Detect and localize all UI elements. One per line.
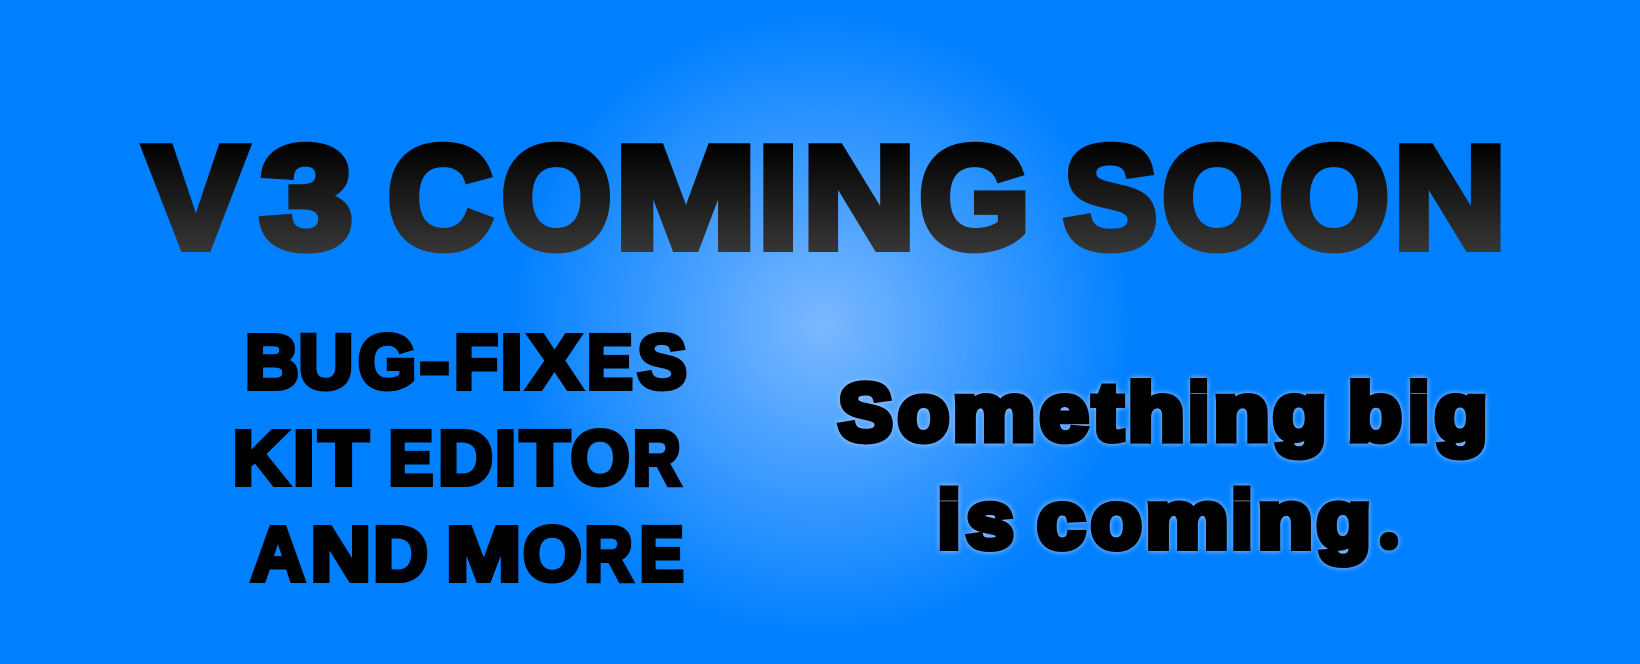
teaser line 1: i: [1188, 368, 1209, 458]
teaser line 1: S: [838, 368, 892, 458]
feature: kit editor: I: [293, 416, 315, 502]
teaser line 1: b: [1348, 368, 1402, 458]
teaser line 2: i: [1231, 476, 1253, 566]
feature: and more: R: [584, 512, 633, 598]
title: M: [615, 116, 756, 278]
feature: bug-fixes: B: [245, 320, 299, 406]
feature: kit editor: E: [388, 416, 433, 502]
feature: bug-fixes: X: [528, 320, 582, 406]
title: O: [1162, 116, 1272, 278]
title: 3: [260, 116, 352, 278]
teaser line 2: n: [1258, 476, 1313, 566]
feature: and more: D: [373, 512, 428, 598]
teaser line 2: i: [938, 476, 961, 566]
teaser line 1: t: [1093, 368, 1123, 458]
feature: and more: A: [251, 512, 305, 598]
teaser line 1: g: [1435, 368, 1488, 458]
feature: kit editor: O: [570, 416, 630, 502]
feature: bug-fixes: I: [500, 320, 523, 406]
teaser line 1: m: [953, 368, 1035, 458]
title: I: [758, 116, 798, 278]
feature: bug-fixes: G: [358, 320, 416, 406]
title: C: [388, 116, 492, 278]
teaser text: [838, 368, 1488, 566]
feature: and more: E: [639, 512, 684, 598]
teaser line 2: .: [1388, 534, 1391, 545]
teaser line 2: o: [1091, 476, 1142, 566]
title: N: [803, 116, 916, 278]
feature: bug-fixes: S: [637, 320, 687, 406]
title: S: [1064, 116, 1157, 278]
title: O: [1279, 116, 1389, 278]
feature: and more: M: [446, 512, 522, 598]
feature: kit editor: I: [495, 416, 516, 502]
feature: kit editor: D: [438, 416, 493, 502]
teaser line 1: e: [1040, 368, 1088, 458]
teaser line 1: i: [1408, 368, 1429, 458]
title: O: [502, 116, 612, 278]
feature list: [232, 320, 687, 598]
teaser line 1: o: [898, 368, 949, 458]
feature: bug-fixes: -: [420, 320, 450, 406]
feature: kit editor: K: [232, 416, 288, 502]
teaser line 1: g: [1273, 368, 1326, 458]
feature: kit editor: R: [633, 416, 681, 502]
feature: bug-fixes: E: [587, 320, 633, 406]
feature: kit editor: T: [319, 416, 369, 502]
teaser line 2: s: [966, 476, 1014, 566]
teaser line 1: h: [1128, 368, 1185, 458]
feature: and more: O: [523, 512, 582, 598]
feature: bug-fixes: F: [454, 320, 498, 406]
title: V: [145, 116, 246, 278]
feature: and more: N: [310, 512, 371, 598]
title: N: [1394, 116, 1506, 278]
teaser line 1: n: [1214, 368, 1270, 458]
title: G: [919, 116, 1030, 278]
teaser line 2: c: [1037, 476, 1085, 566]
feature: kit editor: T: [520, 416, 570, 502]
teaser line 2: g: [1317, 476, 1371, 566]
feature: bug-fixes: U: [298, 320, 353, 406]
teaser line 2: m: [1146, 476, 1228, 566]
